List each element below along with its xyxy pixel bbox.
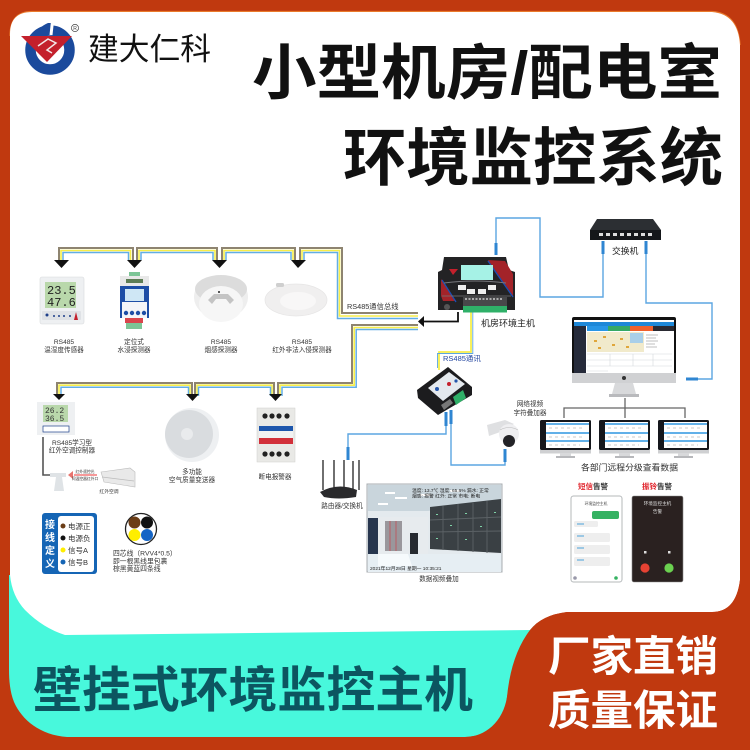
small RS485 module xyxy=(417,367,472,415)
device: air quality transmitter xyxy=(165,408,219,462)
wiring legend xyxy=(42,513,97,574)
wiring legend: 线 xyxy=(45,531,55,544)
wiring legend: 信号A xyxy=(68,545,88,555)
sensor label: smoke: 烟感探测器 xyxy=(205,345,238,354)
central monitor xyxy=(572,317,676,397)
ringing phone xyxy=(632,496,683,582)
department tree lines xyxy=(564,398,685,418)
sensor label: temperature humidity: RS485 xyxy=(54,339,74,346)
video overlay screenshot: 烟感: 报警 红外: 正常 市电: 断电 xyxy=(412,492,480,500)
SMS phone: 环境监控主机 xyxy=(585,501,608,506)
router label: 路由器/交换机 xyxy=(321,501,363,510)
cable description: 四芯线（RVV4*0.5） xyxy=(113,550,177,558)
device: IR air conditioner controller xyxy=(37,402,75,435)
department caption: 各部门远程分级查看数据 xyxy=(581,462,678,472)
ringing alert title: 振铃告警 xyxy=(642,481,672,491)
router xyxy=(320,460,359,498)
air conditioner label: 红外空调 xyxy=(99,488,119,495)
network cables xyxy=(346,218,712,465)
video overlay screenshot: 2021年12月28日 星期一 10:35:21 xyxy=(370,565,442,572)
video overlay screenshot xyxy=(367,484,502,572)
air conditioner xyxy=(101,468,135,487)
banner heading: 壁挂式环境监控主机 xyxy=(33,664,473,718)
switch label: 交换机 xyxy=(612,245,639,256)
sensor: infrared intrusion xyxy=(265,283,327,316)
sensor: smoke detector xyxy=(194,275,248,322)
department monitor 2 xyxy=(599,420,650,458)
promo line 2: 质量保证 xyxy=(548,687,718,734)
sensor: temperature humidity: 47.6 xyxy=(47,296,76,310)
device label: power alarm: 断电报警器 xyxy=(259,472,292,481)
sensor label: infrared: 红外非法入侵探测器 xyxy=(272,345,332,354)
dome camera xyxy=(487,420,519,447)
IR emitter xyxy=(50,473,66,491)
wiring legend: 义 xyxy=(45,558,55,570)
wiring legend: 信号B xyxy=(68,557,88,567)
wiring legend: 定 xyxy=(45,544,55,557)
four core cable icon xyxy=(126,514,156,544)
sensor label: infrared: RS485 xyxy=(292,339,312,346)
IR signal arrow: 红外遥控光 xyxy=(76,469,95,474)
camera label: 字符叠加器 xyxy=(514,408,547,417)
video overlay screenshot: 温度: 13.7℃ 湿度: 65.6% 漏水: 正常 xyxy=(412,487,489,494)
arrows into sensors xyxy=(53,260,306,401)
RS485 upper sensor bus xyxy=(59,248,418,318)
switch xyxy=(590,219,661,240)
bus label: RS485通信总线 xyxy=(347,302,399,311)
wiring legend: 电源负 xyxy=(68,533,90,543)
RS485 lower sensor bus xyxy=(57,325,418,396)
sensor label: water leak: 水浸探测器 xyxy=(118,345,151,354)
arrow to bus xyxy=(418,312,458,327)
title line 1: 小型机房/配电室 xyxy=(252,40,722,107)
promo line 1: 厂家直销 xyxy=(548,633,718,680)
RS485 link label: RS485通讯 xyxy=(443,353,481,363)
device label: IR controller: 红外空调控制器 xyxy=(49,446,95,454)
sensor: water leak xyxy=(120,272,149,329)
ringing phone: 告警 xyxy=(653,508,662,515)
device label: IR controller: RS485学习型 xyxy=(52,440,92,447)
title line 2: 环境监控系统 xyxy=(343,124,723,194)
logo xyxy=(21,21,79,70)
SMS alert title: 短信告警 xyxy=(578,481,608,491)
camera label: 网络视频 xyxy=(517,401,543,408)
sensor label: temperature humidity: 温湿度传感器 xyxy=(44,345,84,354)
video caption: 数据视频叠加 xyxy=(419,574,459,583)
device label: air quality: 多功能 xyxy=(182,469,202,476)
promo block xyxy=(0,580,750,750)
department monitor 1 xyxy=(540,420,591,458)
IR emitter cable xyxy=(43,437,52,475)
IR signal arrow: 同温控器红外口 xyxy=(72,476,98,481)
sensor: temperature humidity: 23.5 xyxy=(47,284,76,298)
cable description: 即一根黑线里包裹 xyxy=(113,556,168,565)
cable description: 棕黑黄蓝四条线 xyxy=(113,564,161,573)
sensor label: water leak: 定位式 xyxy=(124,339,144,346)
wiring legend: 接 xyxy=(45,520,55,531)
IR signal arrow xyxy=(68,469,98,481)
device: power failure alarm xyxy=(257,408,295,462)
RS485 link wire xyxy=(438,312,473,370)
main controller xyxy=(438,257,515,312)
device label: air quality: 空气质量变送器 xyxy=(169,475,215,484)
device: IR air conditioner controller: 26.2 xyxy=(45,407,64,416)
wiring legend: 电源正 xyxy=(68,521,91,531)
teal banner background xyxy=(9,575,535,737)
main controller label: 机房环境主机 xyxy=(481,318,535,328)
SMS phone xyxy=(571,496,622,582)
sensor: temperature humidity xyxy=(40,277,84,324)
department monitor 3 xyxy=(658,420,709,458)
sensor label: smoke: RS485 xyxy=(211,339,231,346)
device: IR air conditioner controller: 36.5 xyxy=(45,415,64,424)
logo: R xyxy=(73,26,77,32)
ringing phone: 环境监控主机 xyxy=(644,500,672,507)
brand name: 建大仁科 xyxy=(88,32,211,67)
